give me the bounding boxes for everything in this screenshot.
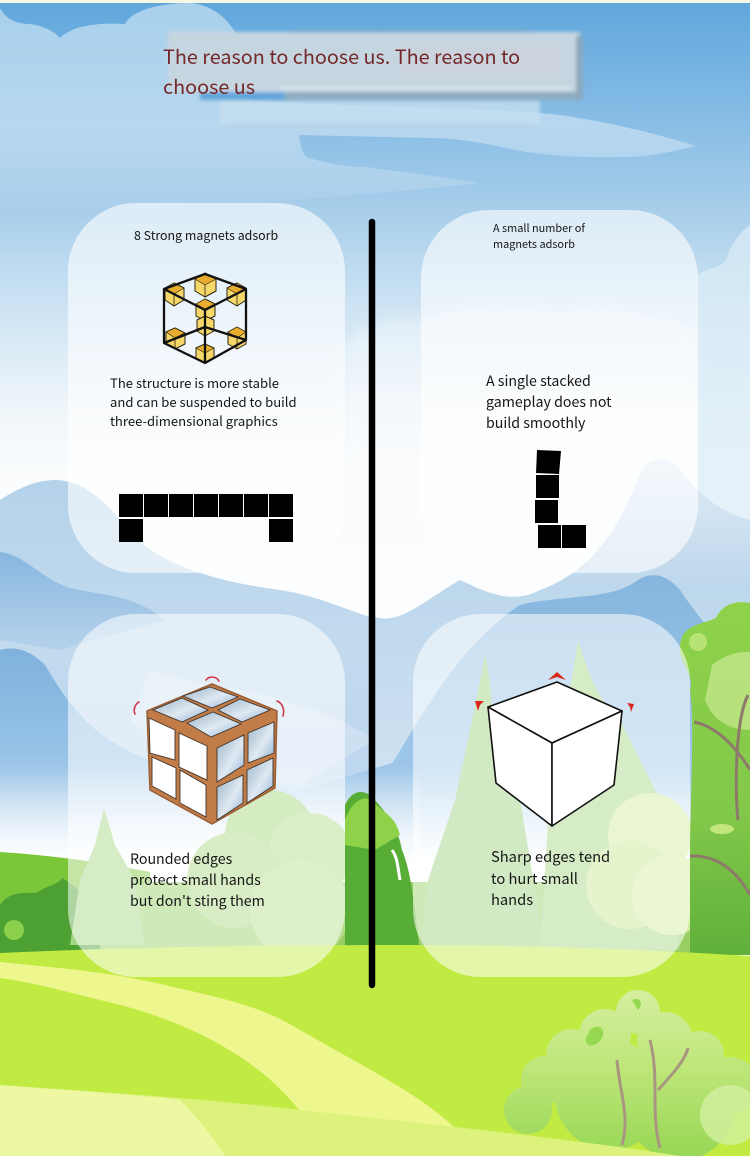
background: grass and path <box>0 945 750 1156</box>
heading: 8 strong magnets adsorb: 8 Strong magnets adsorb <box>134 226 278 244</box>
title text: The reason to choose us. The reason to <box>163 41 520 70</box>
background: foreground meadow <box>0 1085 680 1156</box>
text: structure more stable <box>110 373 297 430</box>
text: single stacked gameplay: gameplay does not <box>486 392 612 412</box>
icon: red sharp-corner marks <box>475 672 634 712</box>
icon: L stack of black squares <box>535 450 586 548</box>
title text <box>163 41 520 100</box>
background: center bushes <box>345 792 420 955</box>
icon: red rounded-corner marks <box>134 677 284 716</box>
heading: a small number of magnets adsorb: magnets adsorb <box>493 236 575 252</box>
text: sharp edges: to hurt small <box>491 868 578 889</box>
text: sharp edges: Sharp edges tend <box>491 846 610 867</box>
text: sharp edges <box>491 846 610 910</box>
heading: a small number of magnets adsorb <box>493 220 585 252</box>
text: single stacked gameplay: build smoothly <box>486 413 586 433</box>
text: rounded edges: protect small hands <box>130 870 261 890</box>
text: structure more stable: and can be suspended to build <box>110 392 297 411</box>
background: distant mountains <box>0 459 750 860</box>
text: rounded edges: but don't sting them <box>130 891 265 911</box>
text: rounded edges <box>130 849 265 911</box>
panel: rounded edges <box>68 614 345 977</box>
text: structure more stable: three-dimensional graphics <box>110 411 278 430</box>
title text: choose us <box>163 71 255 100</box>
text: single stacked gameplay: A single stacked <box>486 371 591 391</box>
background: hills and forest <box>0 852 690 955</box>
text: sharp edges: hands <box>491 889 533 910</box>
icon: rounded wooden cube <box>147 684 277 824</box>
text: single stacked gameplay <box>486 371 612 433</box>
heading: a small number of magnets adsorb: A small number of <box>493 220 585 236</box>
background: right green tree <box>680 602 750 955</box>
center divider <box>369 222 375 985</box>
background: pale trees <box>70 640 712 960</box>
icon: magnet cube <box>164 273 246 363</box>
icon: sharp white cube <box>488 682 622 826</box>
text: structure more stable: The structure is more stable <box>110 373 279 392</box>
icon: bridge of black squares <box>119 494 293 542</box>
panel: few magnets <box>421 210 698 573</box>
background: lower right bushes <box>504 990 750 1156</box>
title banner <box>163 29 583 126</box>
text: rounded edges: Rounded edges <box>130 849 233 869</box>
panel: 8 strong magnets <box>68 203 345 573</box>
panel: sharp edges <box>413 614 690 977</box>
